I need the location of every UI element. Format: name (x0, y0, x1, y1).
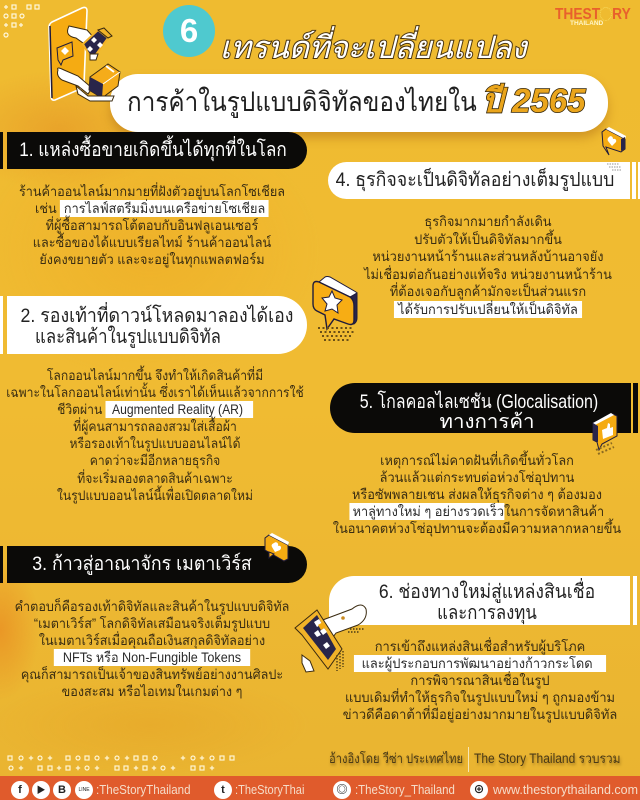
panel 4 heading: 4. ธุรกิจจะเป็นดิจิทัลอย่างเต็มรูปแบบ (335, 169, 614, 191)
title line 2 text: การค้าในรูปแบบดิจิทัลของไทยใน (127, 87, 477, 117)
title line 1: เทรนด์ที่จะเปลี่ยนแปลง (220, 30, 527, 65)
panel 3 body text: คุณก็สามารถเป็นเจ้าของสินทรัพย์อย่างงานศิลปะ (21, 667, 283, 682)
footer icon: line today: LINE (78, 787, 90, 793)
panel 3 body text: “เมตาเวิร์ส” โลกดิจิทัลเสมือนจริงเต็มรูปแบบ (34, 616, 270, 631)
panel 4 body text: ธุรกิจมากมายกำลังเดิน (424, 214, 552, 229)
panel 4 heading (328, 162, 630, 199)
panel 1 body text: ที่ผู้ซื้อสามารถโต้ตอบกับอินฟลูเอนเซอร์ (46, 218, 258, 233)
logo: The Story Thailand: THAILAND (570, 20, 603, 27)
panel 3 body text (15, 598, 289, 699)
footer icon: line today (75, 781, 93, 799)
footer icon: facebook (11, 781, 29, 799)
panel 2 heading (7, 296, 307, 354)
illustration: phone with hands and parcel (48, 6, 120, 102)
panel 3 header (0, 533, 307, 583)
panel 3 body text: ของสะสม หรือไอเทมในเกมต่าง ๆ (62, 684, 242, 699)
footer icon: facebook: f (18, 784, 22, 796)
title year: ปี 2565 (482, 82, 586, 119)
panel 2 header (0, 296, 307, 354)
decorative shapes top-left (3, 4, 40, 38)
panel 4 body text: หน่วยงานหน้าร้านและส่วนหลังบ้านอาจยัง (372, 249, 604, 264)
panel 5 heading (330, 383, 631, 433)
panel 2 body text: คาดว่าจะมีอีกหลายธุรกิจ (90, 453, 220, 468)
footer text: TheStoryThailand: :TheStoryThailand (96, 782, 191, 797)
panel 1 body text: และซื้อของได้แบบเรียลไทม์ ร้านค้าออนไลน์ (33, 235, 271, 250)
panel 4 body text: ปรับตัวให้เป็นดิจิทัลมากขึ้น (414, 232, 562, 247)
footer icon: instagram: ◎ (336, 784, 348, 796)
panel 1 body text: ยังคงขยายตัว และจะอยู่ในทุกแพลตฟอร์ม (39, 252, 265, 267)
panel 3 body text: ในเมตาเวิร์สเมื่อคุณถือเงินสกุลดิจิทัลอย่าง (39, 633, 265, 648)
panel 5 body text: เหตุการณ์ไม่คาดฝันที่เกิดขึ้นทั่วโลก (380, 453, 574, 468)
panel 5 body text: ในอนาคตห่วงโซ่อุปทานจะต้องมีความหลากหลายขึ้น (333, 521, 621, 536)
footer icon: youtube (32, 781, 50, 799)
source credit: The Story Thailand รวบรวม (474, 751, 621, 766)
panel 3 body text: คำตอบก็คือรองเท้าดิจิทัลและสินค้าในรูปแบบดิจิทัล (15, 599, 289, 614)
footer icon: web: ⊕ (474, 784, 484, 796)
panel 4 body text: ไม่เชื่อมต่อกันอย่างแท้จริง หน่วยงานหน้าร้าน (364, 267, 612, 282)
panel 6 body text: การพิจารณาสินเชื่อในรูป (410, 673, 550, 688)
panel 5 heading: 5. โกลคอลไลเซชัน (Glocalisation) (360, 391, 598, 413)
panel 5 body text (333, 450, 621, 536)
icon: star speech bubble (312, 276, 358, 341)
footer text: website: www.thestorythailand.com (493, 782, 638, 797)
decorative pattern bottom (7, 755, 235, 771)
panel 1 header (0, 132, 307, 169)
footer text: TheStory_Thailand: :TheStory_Thailand (355, 782, 455, 797)
footer bar (0, 776, 640, 800)
icon: hand holding phone (294, 604, 367, 672)
footer text: TheStoryThai: :TheStoryThai (235, 782, 304, 797)
panel 3 heading: 3. ก้าวสู่อาณาจักร เมตาเวิร์ส (32, 553, 251, 575)
panel 6 heading: และการลงทุน (437, 602, 537, 624)
panel 6 body text: แบบเดิมที่ทำให้ธุรกิจในรูปแบบใหม่ ๆ ถูกมองข้าม (345, 690, 615, 705)
footer icon: twitter (214, 781, 232, 799)
icon: heart speech bubble (264, 533, 289, 562)
panel 4 header (328, 162, 640, 199)
panel 4 body text: ที่ต้องเจอกับลูกค้ามักจะเป็นส่วนแรก (390, 284, 586, 299)
panel 6 body text: ข่าวดีคือดาต้าที่มีอยู่อย่างมากมายในรูปแบบดิจิทัล (343, 707, 617, 722)
panel 5 heading: ทางการค้า (439, 411, 534, 433)
panel 5 body text: หาลู่ทางใหม่ ๆ อย่างรวดเร็วในการจัดหาสินค้า (353, 504, 604, 519)
panel 6 body text: การเข้าถึงแหล่งสินเชื่อสำหรับผู้บริโภค (375, 639, 585, 654)
panel 1 body text (19, 182, 285, 268)
footer icon: instagram (333, 781, 351, 799)
panel 4 body text: ได้รับการปรับเปลี่ยนให้เป็นดิจิทัล (398, 302, 578, 317)
icon: thumbs up bubble (592, 413, 618, 455)
panel 4 body text (363, 214, 612, 318)
title line 2 pill (110, 74, 608, 132)
panel 2 body text: เฉพาะในโลกออนไลน์เท่านั้น ซึ่งเราได้เห็นแล้วจากการใช้ (6, 385, 304, 400)
panel 2 heading: 2. รองเท้าที่ดาวน์โหลดมาลองได้เอง (20, 305, 293, 327)
panel 2 heading: และสินค้าในรูปแบบดิจิทัล (35, 326, 220, 348)
panel 6 heading (329, 576, 630, 625)
title badge: number 6 (163, 5, 215, 57)
footer icon: blockdit: B (58, 784, 66, 796)
source credit (329, 747, 622, 772)
title badge: number 6: 6 (180, 12, 198, 49)
footer icon: blockdit (53, 781, 71, 799)
icon: heart bubble top right (602, 127, 626, 171)
panel 5 body text: ล้วนแล้วแต่กระทบต่อห่วงโซ่อุปทาน (380, 470, 574, 485)
source credit: อ้างอิงโดย วีซ่า ประเทศไทย (329, 751, 463, 766)
panel 6 body text: และผู้ประกอบการพัฒนาอย่างก้าวกระโดด (362, 656, 593, 671)
panel 2 body text: ชีวิตผ่าน Augmented Reality (AR) (57, 402, 243, 417)
panel 2 body text: ในรูปแบบออนไลน์นี้เพื่อเปิดตลาดใหม่ (57, 488, 253, 503)
panel 1 heading (7, 132, 307, 169)
footer icon: web (470, 781, 488, 799)
panel 6 heading: 6. ช่องทางใหม่สู่แหล่งสินเชื่อ (378, 581, 595, 603)
panel 5 header (330, 383, 638, 433)
footer icon: youtube: ▶ (36, 785, 46, 795)
footer icon: twitter: t (221, 784, 225, 796)
panel 5 body text: หรือซัพพลายเชน ส่งผลให้ธุรกิจต่าง ๆ ต้องมอง (352, 487, 602, 502)
panel 2 body text: โลกออนไลน์มากขึ้น จึงทำให้เกิดสินค้าที่มี (47, 368, 263, 383)
panel 2 body text: ที่ผู้คนสามารถลองสวมใส่เสื้อผ้า (73, 419, 237, 434)
panel 3 body text: NFTs หรือ Non-Fungible Tokens (63, 650, 241, 665)
logo: The Story Thailand: THEST RY (555, 6, 631, 23)
panel 3 heading (7, 546, 307, 583)
panel 6 body text (343, 637, 617, 722)
panel 6 header (329, 576, 637, 625)
panel 1 heading: 1. แหล่งซื้อขายเกิดขึ้นได้ทุกที่ในโลก (19, 139, 287, 161)
panel 2 body text: หรือรองเท้าในรูปแบบออนไลน์ได้ (69, 436, 241, 451)
panel 1 body text: เช่น การไลฟ์สตรีมมิ่งบนเครือข่ายโซเชียล (35, 201, 265, 216)
panel 1 body text: ร้านค้าออนไลน์มากมายที่ฝังตัวอยู่บนโลกโซเชียล (19, 184, 285, 199)
panel 2 body text: ที่จะเริ่มลองตลาดสินค้าเฉพาะ (77, 471, 233, 486)
panel 2 body text (6, 366, 304, 504)
